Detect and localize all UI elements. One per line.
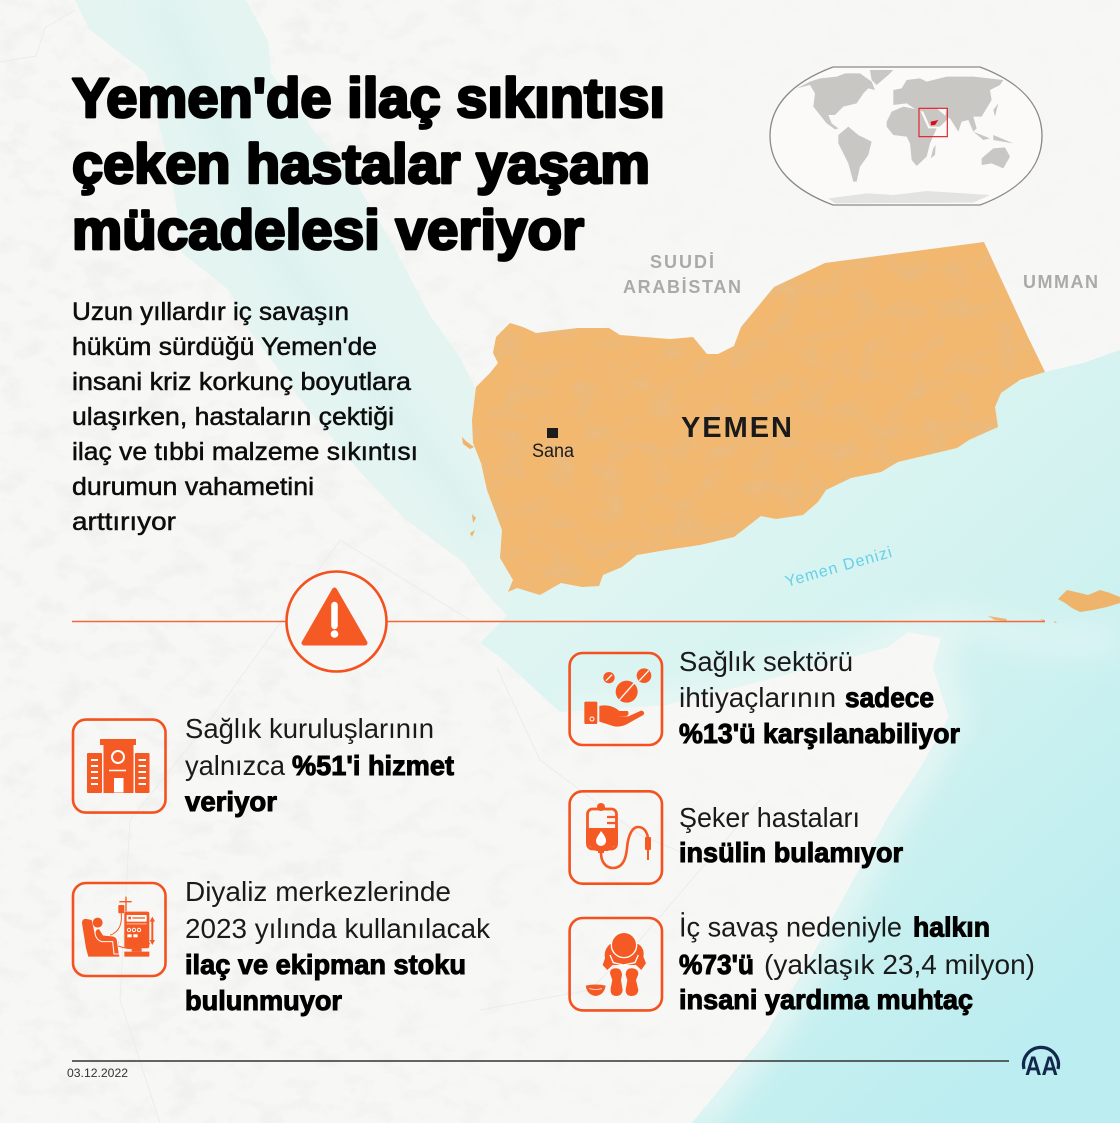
item text (679, 646, 960, 749)
intro text (72, 298, 418, 536)
item text: 2023 yılında kullanılacak (185, 913, 491, 944)
intro text: arttırıyor (72, 508, 176, 536)
label: Umman: UMMAN (1023, 272, 1098, 292)
map: Yemen (460, 230, 1120, 623)
item text (679, 912, 1035, 1015)
logo: AA: AA (1025, 1051, 1058, 1081)
item text: ilaç ve ekipman stoku (185, 949, 466, 980)
label: Yemen: YEMEN (681, 412, 792, 444)
intro text: insani kriz korkunç boyutlara (72, 368, 411, 396)
footer rule (72, 1060, 1009, 1062)
intro text: durumun vahametini (72, 473, 314, 501)
capital marker: Sana (532, 428, 574, 462)
item: health facilities (73, 713, 454, 817)
date: 03.12.2022 (67, 1068, 128, 1080)
item text (185, 876, 491, 1016)
item text (679, 802, 903, 868)
item text: veriyor (185, 786, 277, 817)
icon: dialysis machine (73, 883, 166, 976)
item text: %13'ü karşılanabiliyor (679, 718, 960, 749)
item text: halkın (913, 912, 990, 942)
item text: İç savaş nedeniyle (679, 912, 902, 942)
title: mücadelesi veriyor (72, 198, 584, 261)
divider line (72, 620, 1045, 622)
intro text: ilaç ve tıbbi malzeme sıkıntısı (72, 438, 418, 466)
item text: Sağlık kuruluşlarının (185, 713, 434, 744)
icon: insulin drip bag (570, 791, 662, 884)
item: dialysis centres (73, 876, 491, 1016)
item text (185, 713, 454, 817)
capital marker: Sana: Sana (532, 441, 574, 462)
title: Yemen'de ilaç sıkıntısı (72, 66, 665, 129)
item text: Şeker hastaları (679, 802, 860, 833)
icon: crouching person with bowl (570, 918, 662, 1010)
title (72, 66, 665, 261)
item text: (yaklaşık 23,4 milyon) (764, 949, 1035, 980)
label: Yemen Denizi: Yemen Denizi (783, 544, 894, 591)
icon: hand with pills (570, 653, 662, 745)
label: Suudi Arabistan: ARABİSTAN (623, 277, 741, 297)
intro text: ulaşırken, hastaların çektiği (72, 403, 394, 431)
item text: bulunmuyor (185, 985, 342, 1016)
item text: ihtiyaçlarının (679, 682, 836, 713)
item text: %73'ü (679, 949, 754, 980)
item: diabetics (570, 791, 903, 884)
item: health sector needs (570, 646, 960, 749)
item: people in need (570, 912, 1035, 1015)
label: Suudi Arabistan (623, 252, 741, 297)
item text: Diyaliz merkezlerinde (185, 876, 451, 907)
item text: insülin bulamıyor (679, 837, 903, 868)
item text: %51'i hizmet (292, 750, 454, 781)
intro text: hüküm sürdüğü Yemen'de (72, 333, 377, 361)
title: çeken hastalar yaşam (72, 132, 650, 195)
icon: warning sign (286, 572, 386, 672)
intro text: Uzun yıllardır iç savaşın (72, 298, 349, 326)
inset world map (770, 67, 1042, 205)
item text: sadece (845, 682, 934, 713)
item text: yalnızca (185, 750, 285, 781)
item text: insani yardıma muhtaç (679, 984, 973, 1015)
label: Suudi Arabistan: SUUDİ (650, 252, 714, 272)
icon: hospital (73, 720, 166, 813)
item text: Sağlık sektörü (679, 646, 853, 677)
